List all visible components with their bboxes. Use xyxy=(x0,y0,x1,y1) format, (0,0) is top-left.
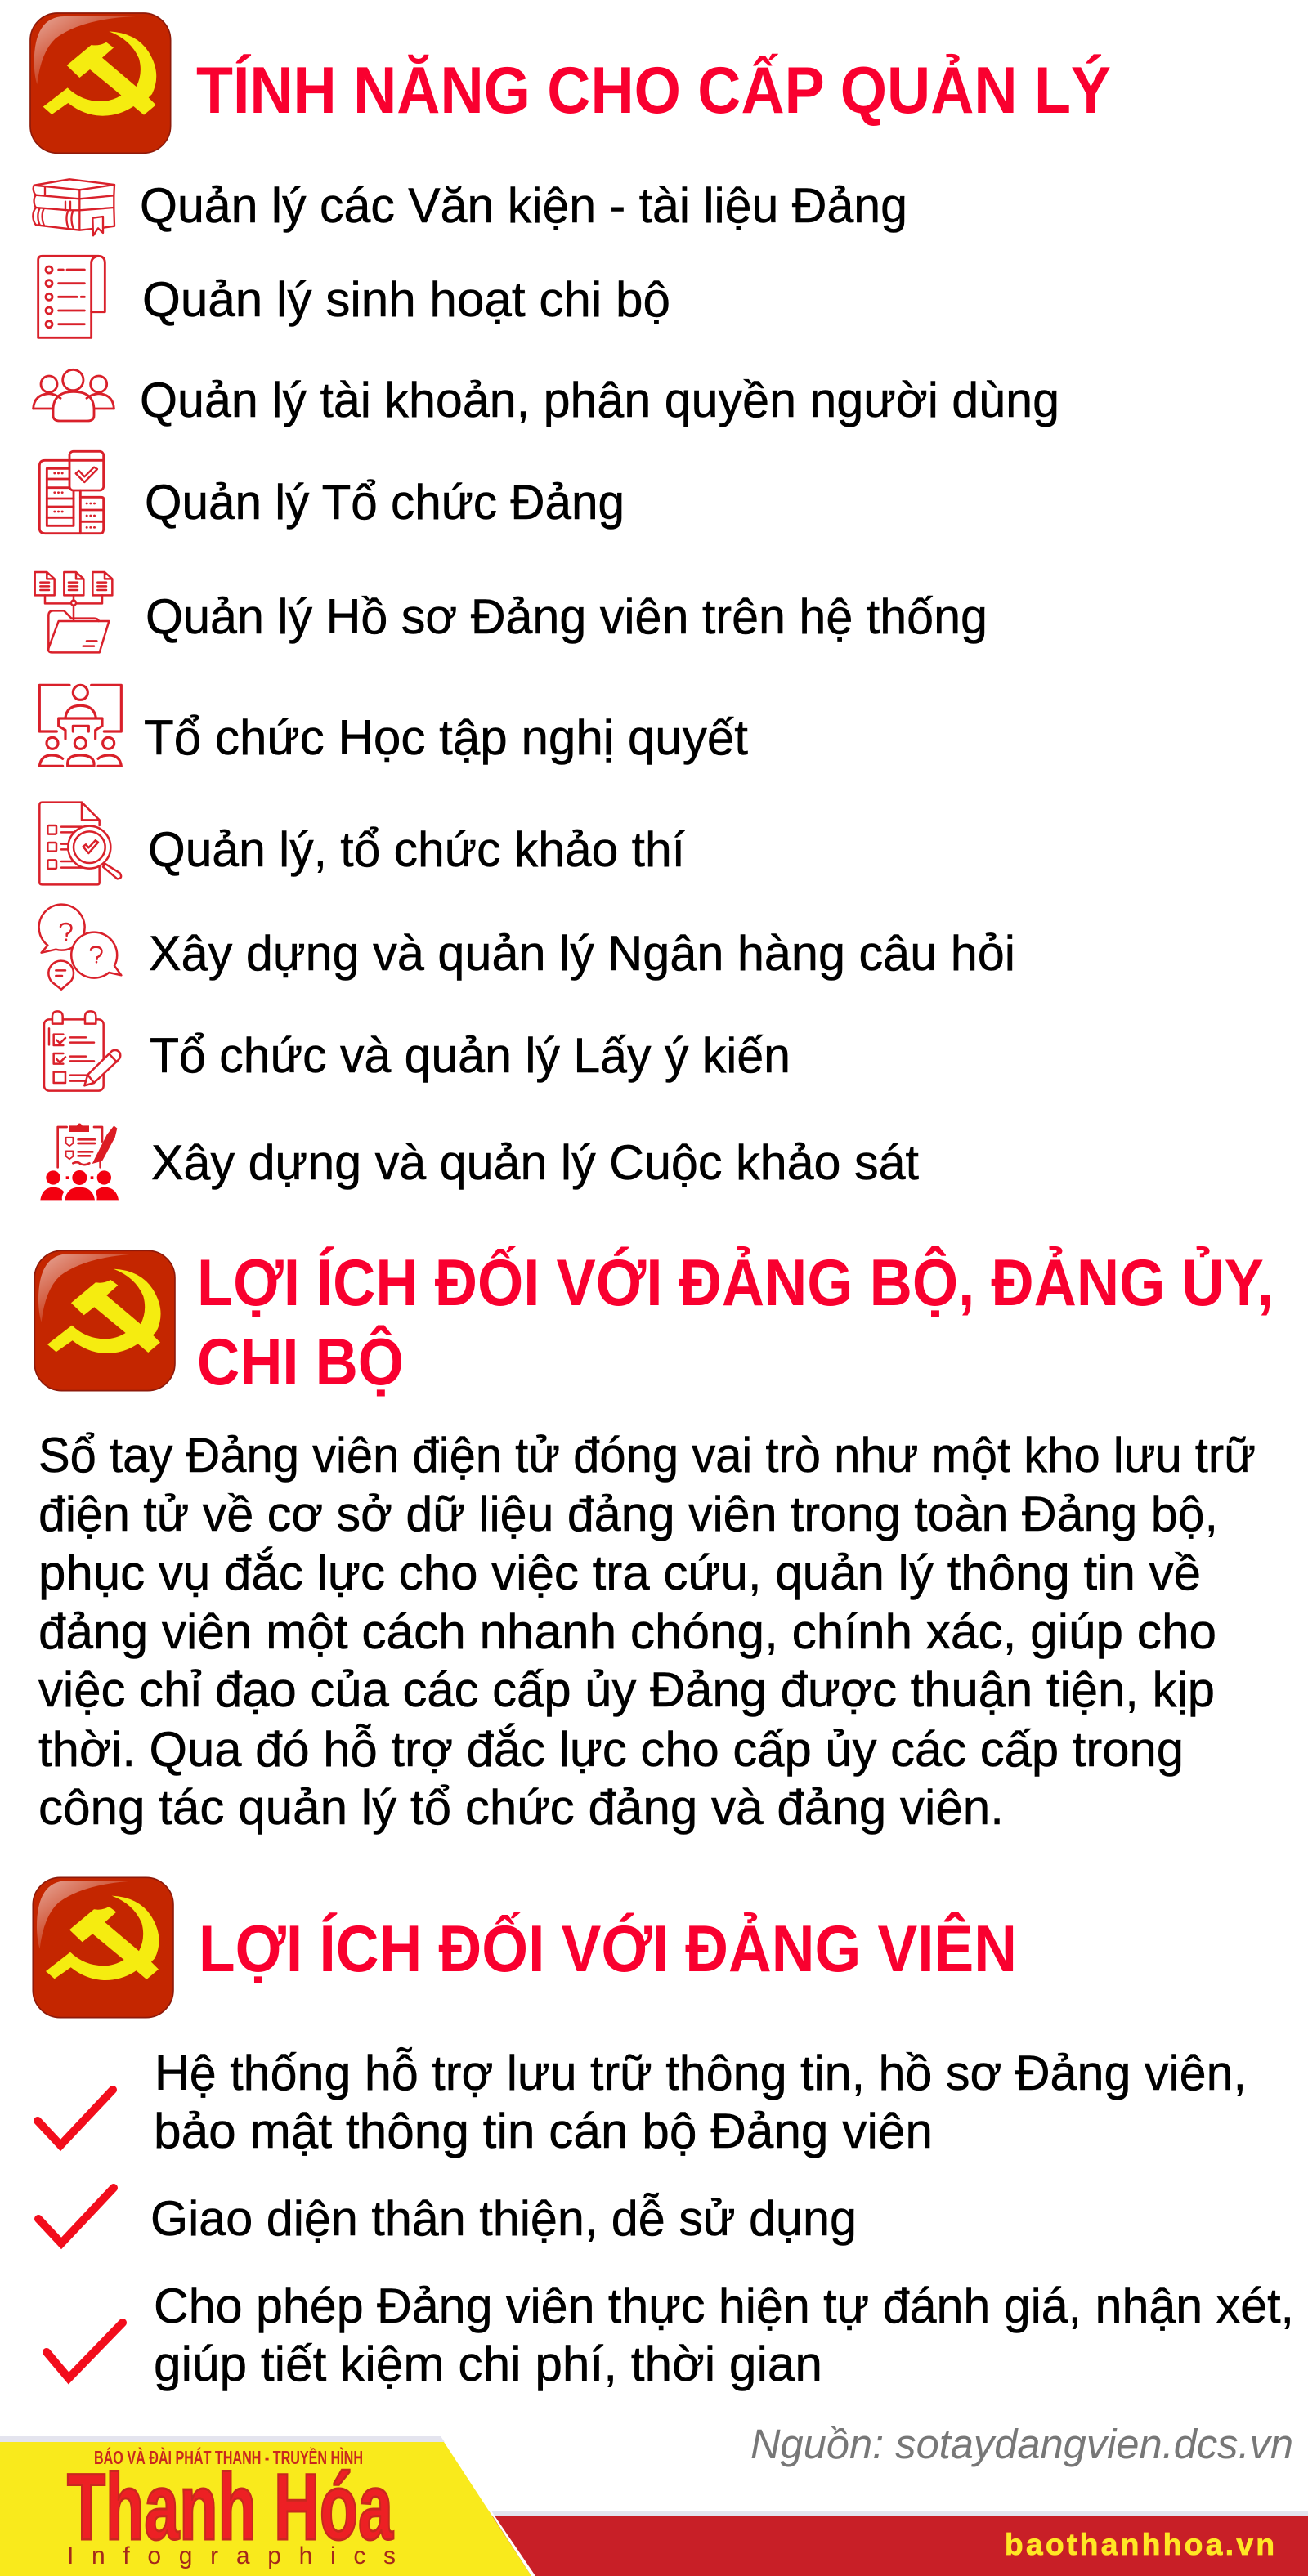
icon: organisation data xyxy=(39,451,104,534)
text block: description paragraph xyxy=(38,1428,1256,1835)
icon: books xyxy=(33,179,114,235)
text: benefit 1 xyxy=(154,2046,1247,2158)
icon: exam review xyxy=(39,803,121,884)
panel: benefits for party organisations xyxy=(34,1246,1274,1835)
logo: newspaper name: BÁO VÀ ĐÀI PHÁT THANH - TRUYỀN HÌNH xyxy=(94,2446,363,2468)
icon: list document xyxy=(38,256,105,338)
text: website: baothanhhoa.vn xyxy=(1005,2528,1274,2561)
heading: benefits for party organisations: CHI BỘ xyxy=(197,1325,404,1399)
text block: description paragraph: công tác quản lý tổ chức đảng và đảng viên. xyxy=(38,1780,1004,1835)
text: row 10: Xây dựng và quản lý Cuộc khảo sát xyxy=(151,1135,919,1190)
text: row 5: Quản lý Hồ sơ Đảng viên trên hệ thống xyxy=(146,589,988,644)
text: benefit 1: Hệ thống hỗ trợ lưu trữ thông tin, hồ sơ Đảng viên, xyxy=(155,2046,1247,2100)
text block: description paragraph: việc chỉ đạo của các cấp ủy Đảng được thuận tiện, kịp xyxy=(38,1662,1215,1717)
icon: profile folder xyxy=(35,572,112,652)
text: benefit 1: bảo mật thông tin cán bộ Đảng viên xyxy=(154,2104,933,2158)
text: row 6: Tổ chức Học tập nghị quyết xyxy=(144,710,748,765)
icon: users xyxy=(34,369,114,421)
text: row 2: Quản lý sinh hoạt chi bộ xyxy=(142,272,670,327)
text: source credit: Nguồn: sotaydangvien.dcs.vn xyxy=(750,2421,1293,2467)
icon: check 2 xyxy=(38,2188,114,2243)
footer band xyxy=(0,2436,1308,2576)
text: benefit 3: Cho phép Đảng viên thực hiện tự đánh giá, nhận xét, xyxy=(154,2279,1294,2333)
logo: newspaper name: Thanh Hóa xyxy=(67,2455,394,2560)
text: row 1: Quản lý các Văn kiện - tài liệu Đảng xyxy=(140,178,907,233)
text block: description paragraph: điện tử về cơ sở dữ liệu đảng viên trong toàn Đảng bộ, xyxy=(38,1487,1218,1541)
icon: check 1 xyxy=(38,2090,113,2145)
heading: benefits for party members: LỢI ÍCH ĐỐI VỚI ĐẢNG VIÊN xyxy=(199,1911,1017,1986)
text: row 4: Quản lý Tổ chức Đảng xyxy=(145,475,625,530)
text: row 7: Quản lý, tổ chức khảo thí xyxy=(148,822,685,877)
icon: party emblem xyxy=(34,1250,175,1391)
logo: newspaper name xyxy=(67,2446,396,2569)
text: row 9: Tổ chức và quản lý Lấy ý kiến xyxy=(150,1028,791,1083)
panel: features for managers xyxy=(30,13,1111,1200)
icon: party emblem xyxy=(30,13,171,153)
logo: newspaper name: Infographics xyxy=(67,2542,396,2569)
text: row 3: Quản lý tài khoản, phân quyền người dùng xyxy=(140,373,1059,427)
panel: benefits for party members xyxy=(33,1877,1294,2391)
text block: description paragraph: Sổ tay Đảng viên điện tử đóng vai trò như một kho lưu trữ xyxy=(38,1428,1256,1483)
red footer bar xyxy=(482,2511,1308,2576)
text: benefit 3: giúp tiết kiệm chi phí, thời gian xyxy=(154,2337,822,2391)
text: benefit 3 xyxy=(154,2279,1294,2391)
icon: question bubbles xyxy=(39,905,121,990)
text block: description paragraph: phục vụ đắc lực cho việc tra cứu, quản lý thông tin về xyxy=(38,1545,1201,1600)
text: benefit 2: Giao diện thân thiện, dễ sử dụng xyxy=(150,2191,857,2246)
text: row 8: Xây dựng và quản lý Ngân hàng câu hỏi xyxy=(149,926,1015,981)
text block: description paragraph: thời. Qua đó hỗ trợ đắc lực cho cấp ủy các cấp trong xyxy=(38,1722,1184,1777)
yellow logo panel xyxy=(0,2436,535,2576)
icon: opinion checklist xyxy=(44,1011,120,1091)
icon: party emblem xyxy=(33,1877,173,2018)
heading: features for managers: TÍNH NĂNG CHO CẤP QUẢN LÝ xyxy=(196,53,1111,127)
heading: benefits for party organisations xyxy=(197,1246,1274,1399)
icon: check 3 xyxy=(47,2323,123,2378)
icon: study session xyxy=(39,685,121,766)
text block: description paragraph: đảng viên một cách nhanh chóng, chính xác, giúp cho xyxy=(38,1604,1216,1659)
icon: survey with people xyxy=(40,1123,119,1200)
